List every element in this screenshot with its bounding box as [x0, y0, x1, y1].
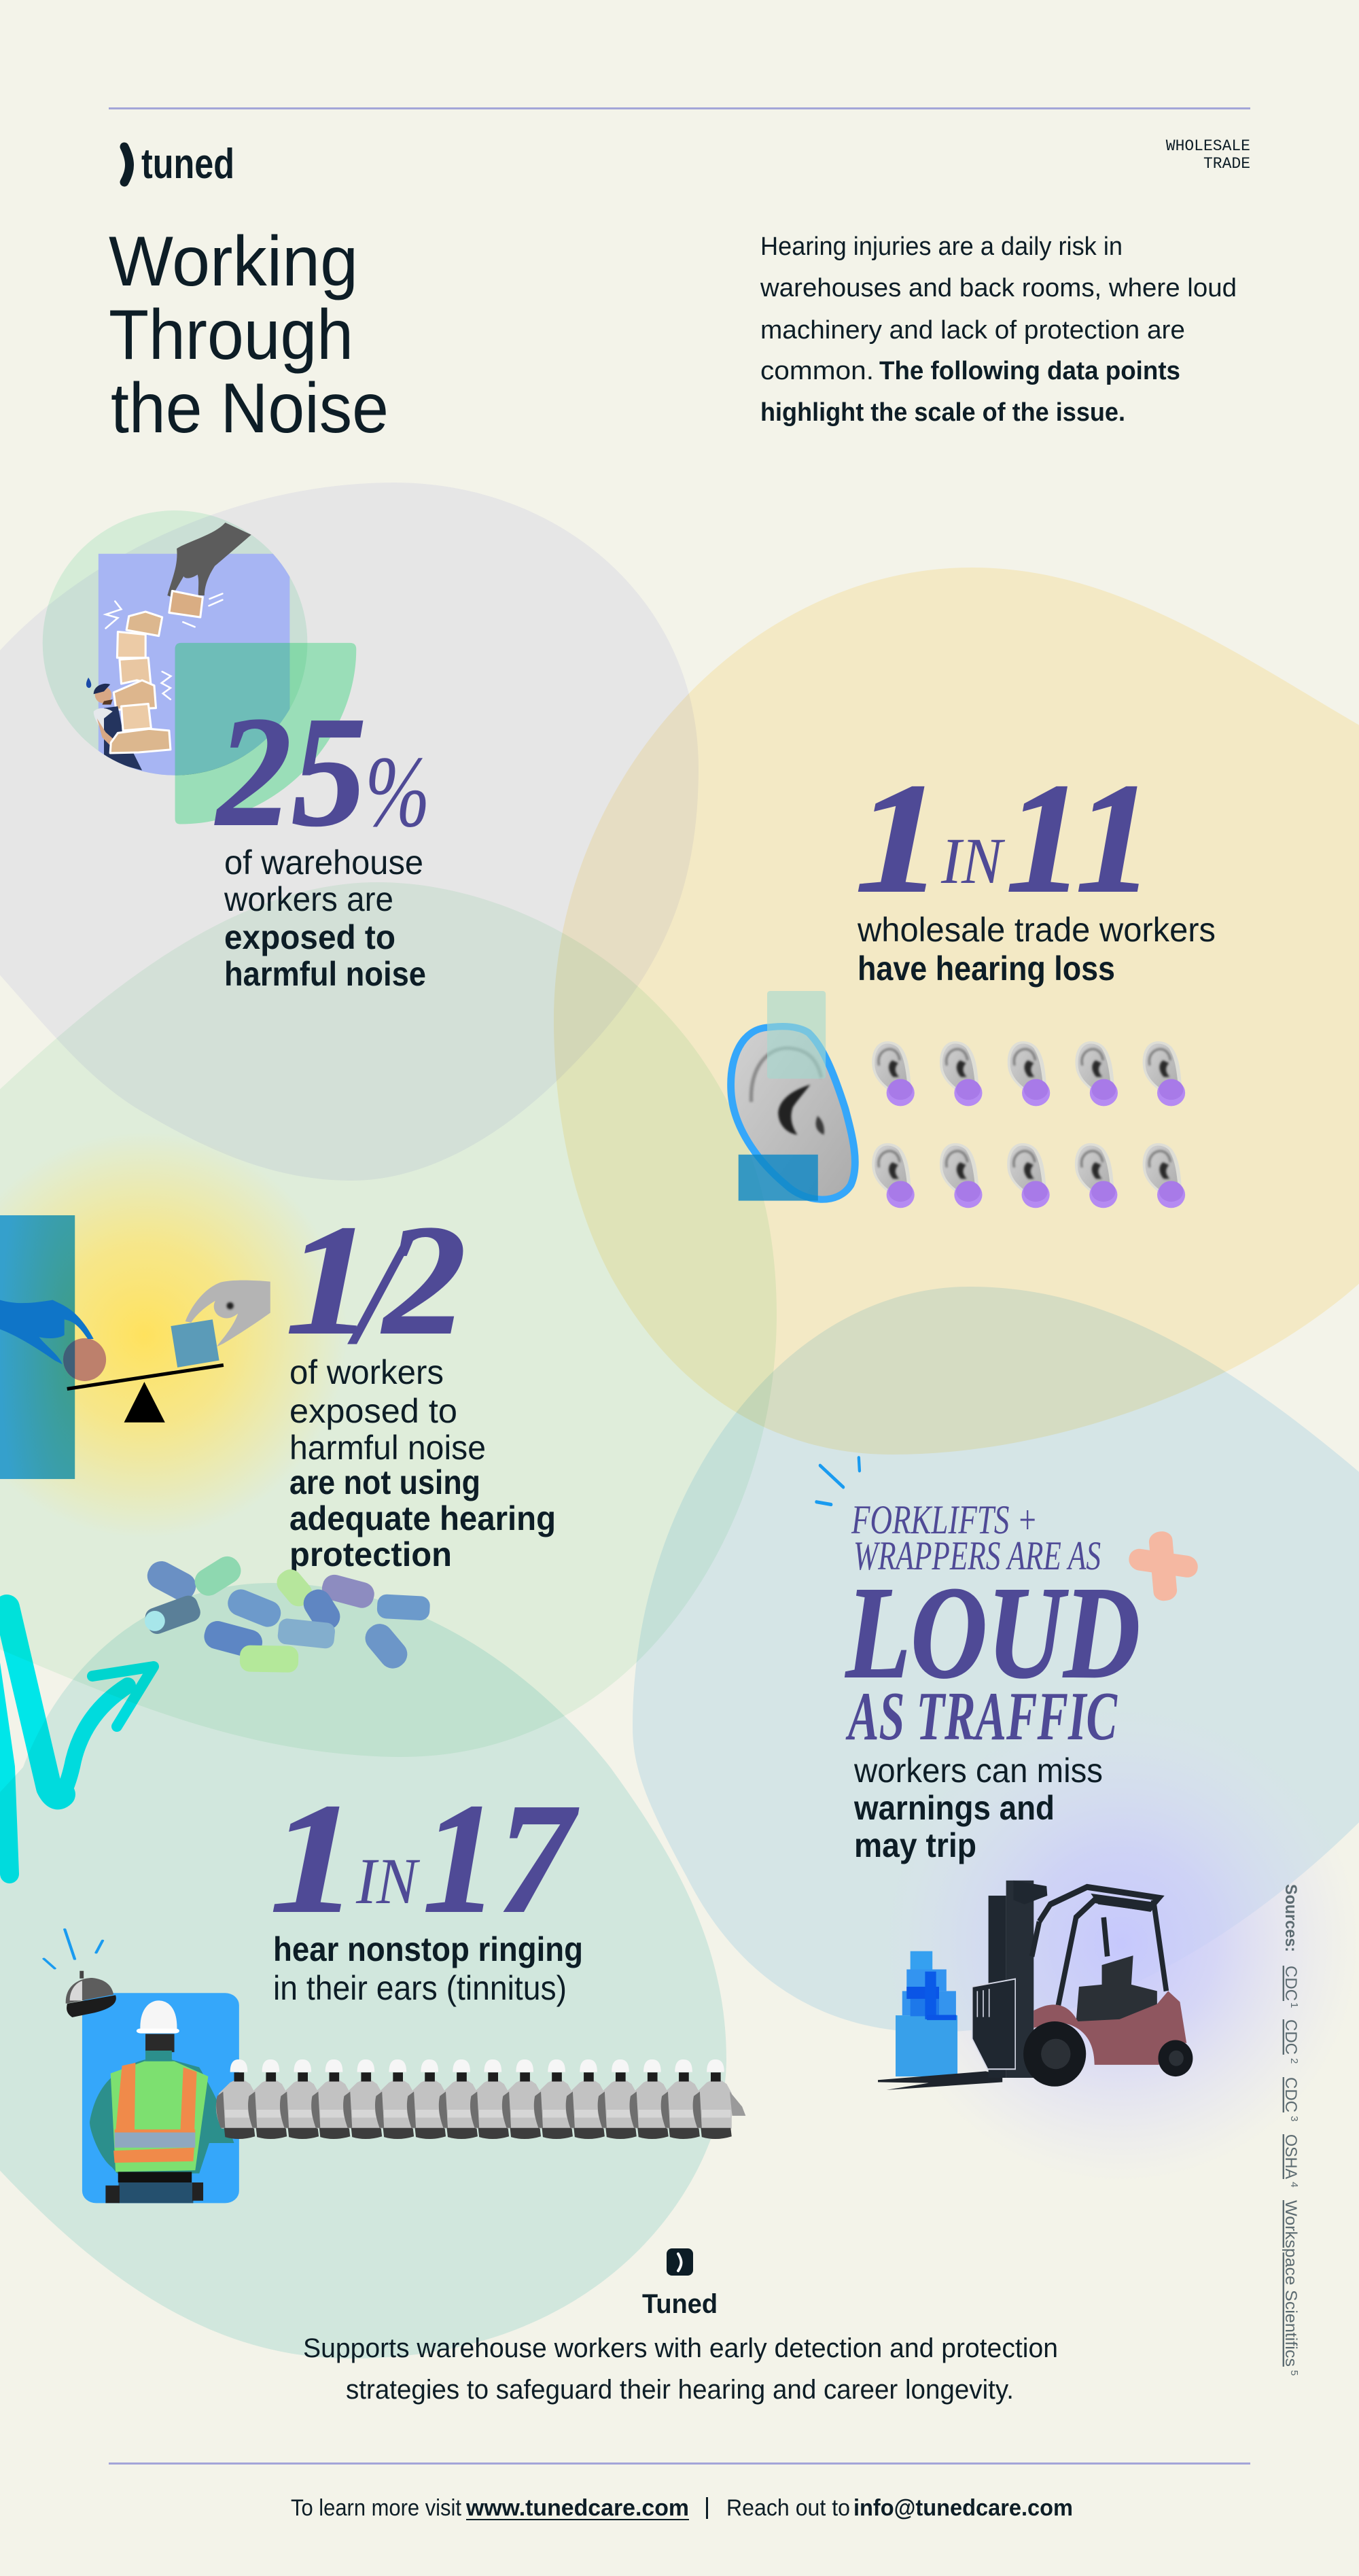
background blob: gray	[0, 483, 699, 1181]
category label: TRADE	[1203, 155, 1250, 173]
intro text: machinery and lack of protection are	[760, 316, 1185, 345]
card overlap on blue	[175, 643, 289, 781]
illustration: falling boxes	[43, 510, 356, 824]
category label	[1166, 137, 1250, 173]
text: 1 in 11 description: have hearing loss	[858, 950, 1115, 988]
brand description: strategies to safeguard their hearing and career longevity.	[346, 2375, 1014, 2405]
stat: 1 in 17: IN	[355, 1845, 421, 1917]
text: 1/2 description: protection	[289, 1535, 452, 1573]
text: 1 in 17 description	[273, 1930, 583, 2007]
footer	[291, 2495, 1073, 2521]
stat: 1 in 11: 1	[855, 751, 943, 926]
cube	[171, 1319, 219, 1368]
sources: OSHA	[1282, 2134, 1300, 2179]
brand name: Tuned	[642, 2289, 718, 2319]
green card	[175, 643, 356, 824]
stat: 1/2: 2	[381, 1193, 466, 1368]
footer: info@tunedcare.com	[853, 2495, 1073, 2521]
intro text: Hearing injuries are a daily risk in	[760, 232, 1123, 261]
blue boxes	[896, 1951, 957, 2076]
text: 1 in 11 description	[857, 911, 1216, 988]
cage	[1032, 1887, 1166, 2008]
intro text: highlight the scale of the issue.	[760, 398, 1125, 427]
sources	[1282, 1884, 1300, 2375]
background blob: blue	[633, 1287, 1359, 2032]
heading: forklifts: LOUD	[845, 1559, 1140, 1705]
yellow glow	[0, 1132, 347, 1538]
stat: 1 in 11	[855, 751, 1154, 926]
text: 1/2 description: are not using	[289, 1463, 480, 1501]
sources: 4	[1288, 2182, 1300, 2187]
forks	[878, 2071, 1002, 2090]
intro text: The following data points	[879, 357, 1180, 385]
text: 25% description: harmful noise	[224, 955, 426, 993]
carriage	[972, 1979, 1015, 2069]
sources: CDC	[1282, 2077, 1300, 2112]
stat: 1 in 11: IN	[940, 824, 1006, 897]
bell sparks	[44, 1930, 103, 1968]
sources: Workspace Scientifics	[1282, 2200, 1300, 2367]
body	[1034, 1991, 1186, 2065]
intro text	[760, 232, 1237, 427]
intro text: common.	[760, 357, 874, 385]
beam	[67, 1365, 224, 1389]
footer: Reach out to	[726, 2495, 850, 2521]
heading: forklifts: AS TRAFFIC	[845, 1678, 1118, 1755]
gray hand	[186, 1281, 270, 1346]
stat: 1 in 17: 17	[423, 1771, 579, 1946]
bell	[66, 1971, 116, 2017]
background blob: yellow	[554, 568, 1359, 1455]
sources: CDC	[1282, 2019, 1300, 2055]
background blob: green	[0, 882, 777, 1757]
illustration: earplugs	[143, 1552, 430, 1674]
background blob: mint	[0, 1583, 726, 2359]
illustration: worker, bell and row of workers	[44, 1930, 745, 2203]
front wheel	[1023, 2021, 1086, 2087]
mint circle	[43, 510, 307, 776]
sources: Sources:	[1282, 1884, 1300, 1952]
stat: 25%: 25	[215, 684, 366, 859]
blue hand	[0, 1300, 94, 1364]
sources: 2	[1288, 2058, 1300, 2064]
icon: bandage	[1128, 1530, 1199, 1602]
top rule	[109, 107, 1250, 109]
blue overlay card	[739, 1155, 818, 1201]
text: forklift description: may trip	[854, 1826, 976, 1864]
icon grid: ten small ears	[872, 1041, 1185, 1208]
green overlay card	[767, 991, 826, 1079]
title: the Noise	[111, 369, 389, 448]
brand description: Supports warehouse workers with early detection and protection	[303, 2333, 1058, 2363]
sources: 3	[1288, 2116, 1300, 2121]
illustration: balance scale with hands	[0, 1132, 347, 1538]
teal panel	[0, 1215, 75, 1479]
text: forklift description: workers can miss	[853, 1752, 1103, 1790]
text: forklift description	[853, 1752, 1103, 1864]
text: 1 in 11 description: wholesale trade workers	[857, 911, 1216, 949]
text: 1 in 17 description: in their ears (tinnitus)	[273, 1969, 567, 2007]
title: Through	[109, 296, 353, 375]
text: 1/2 description: of workers	[289, 1353, 444, 1391]
ball	[63, 1338, 106, 1381]
text: 25% description: of warehouse	[224, 843, 423, 882]
illustration: sparks near forklift heading	[816, 1458, 860, 1505]
stat: 1/2: /	[347, 1191, 418, 1380]
boxes scene	[86, 523, 289, 782]
heading: forklifts: WRAPPERS ARE AS	[853, 1533, 1101, 1578]
illustration: big ear	[731, 991, 855, 1201]
heading: forklifts: FORKLIFTS +	[851, 1497, 1038, 1542]
title	[109, 222, 389, 448]
arrow: teal zigzag	[0, 1607, 154, 1874]
stat: 1 in 17: 1	[270, 1771, 358, 1946]
text: 25% description: workers are	[224, 880, 393, 918]
brand icon	[667, 2248, 693, 2276]
text: 25% description	[224, 843, 426, 993]
text: 1/2 description	[289, 1353, 556, 1573]
sources: 5	[1288, 2370, 1300, 2375]
text: forklift description: warnings and	[853, 1789, 1055, 1827]
blue card	[82, 1993, 239, 2203]
footer: To learn more visit	[291, 2495, 461, 2521]
text: 25% description: exposed to	[224, 918, 395, 956]
stat: 1 in 17	[270, 1771, 579, 1946]
footer: www.tunedcare.com	[465, 2495, 689, 2521]
intro text: warehouses and back rooms, where loud	[760, 274, 1237, 302]
stat: 1/2	[285, 1191, 466, 1380]
text: 1 in 17 description: hear nonstop ringing	[273, 1930, 583, 1968]
mast	[989, 1896, 1006, 2078]
logo: tuned: tuned	[141, 141, 234, 188]
illustration: forklift and blue boxes	[878, 1881, 1193, 2090]
main worker	[90, 2000, 234, 2203]
brand description	[303, 2333, 1058, 2405]
purple glow	[883, 1706, 1359, 2182]
title: Working	[109, 222, 358, 301]
text: 1/2 description: adequate hearing	[289, 1499, 556, 1537]
sources: 1	[1288, 2002, 1300, 2008]
seat	[1076, 1955, 1157, 2034]
stat: 25%: %	[365, 735, 430, 848]
heading: forklifts	[845, 1497, 1140, 1755]
fulcrum	[124, 1382, 165, 1423]
row of sixteen workers	[216, 2059, 745, 2139]
category label: WHOLESALE	[1166, 137, 1250, 155]
text: 1/2 description: exposed to	[289, 1392, 457, 1430]
stat: 1/2: 1	[285, 1193, 374, 1368]
bottom rule	[109, 2462, 1250, 2465]
rear wheel	[1158, 2040, 1193, 2076]
text: 1/2 description: harmful noise	[289, 1429, 486, 1467]
stat: 1 in 11: 11	[1006, 751, 1154, 926]
sources: CDC	[1282, 1966, 1300, 2001]
